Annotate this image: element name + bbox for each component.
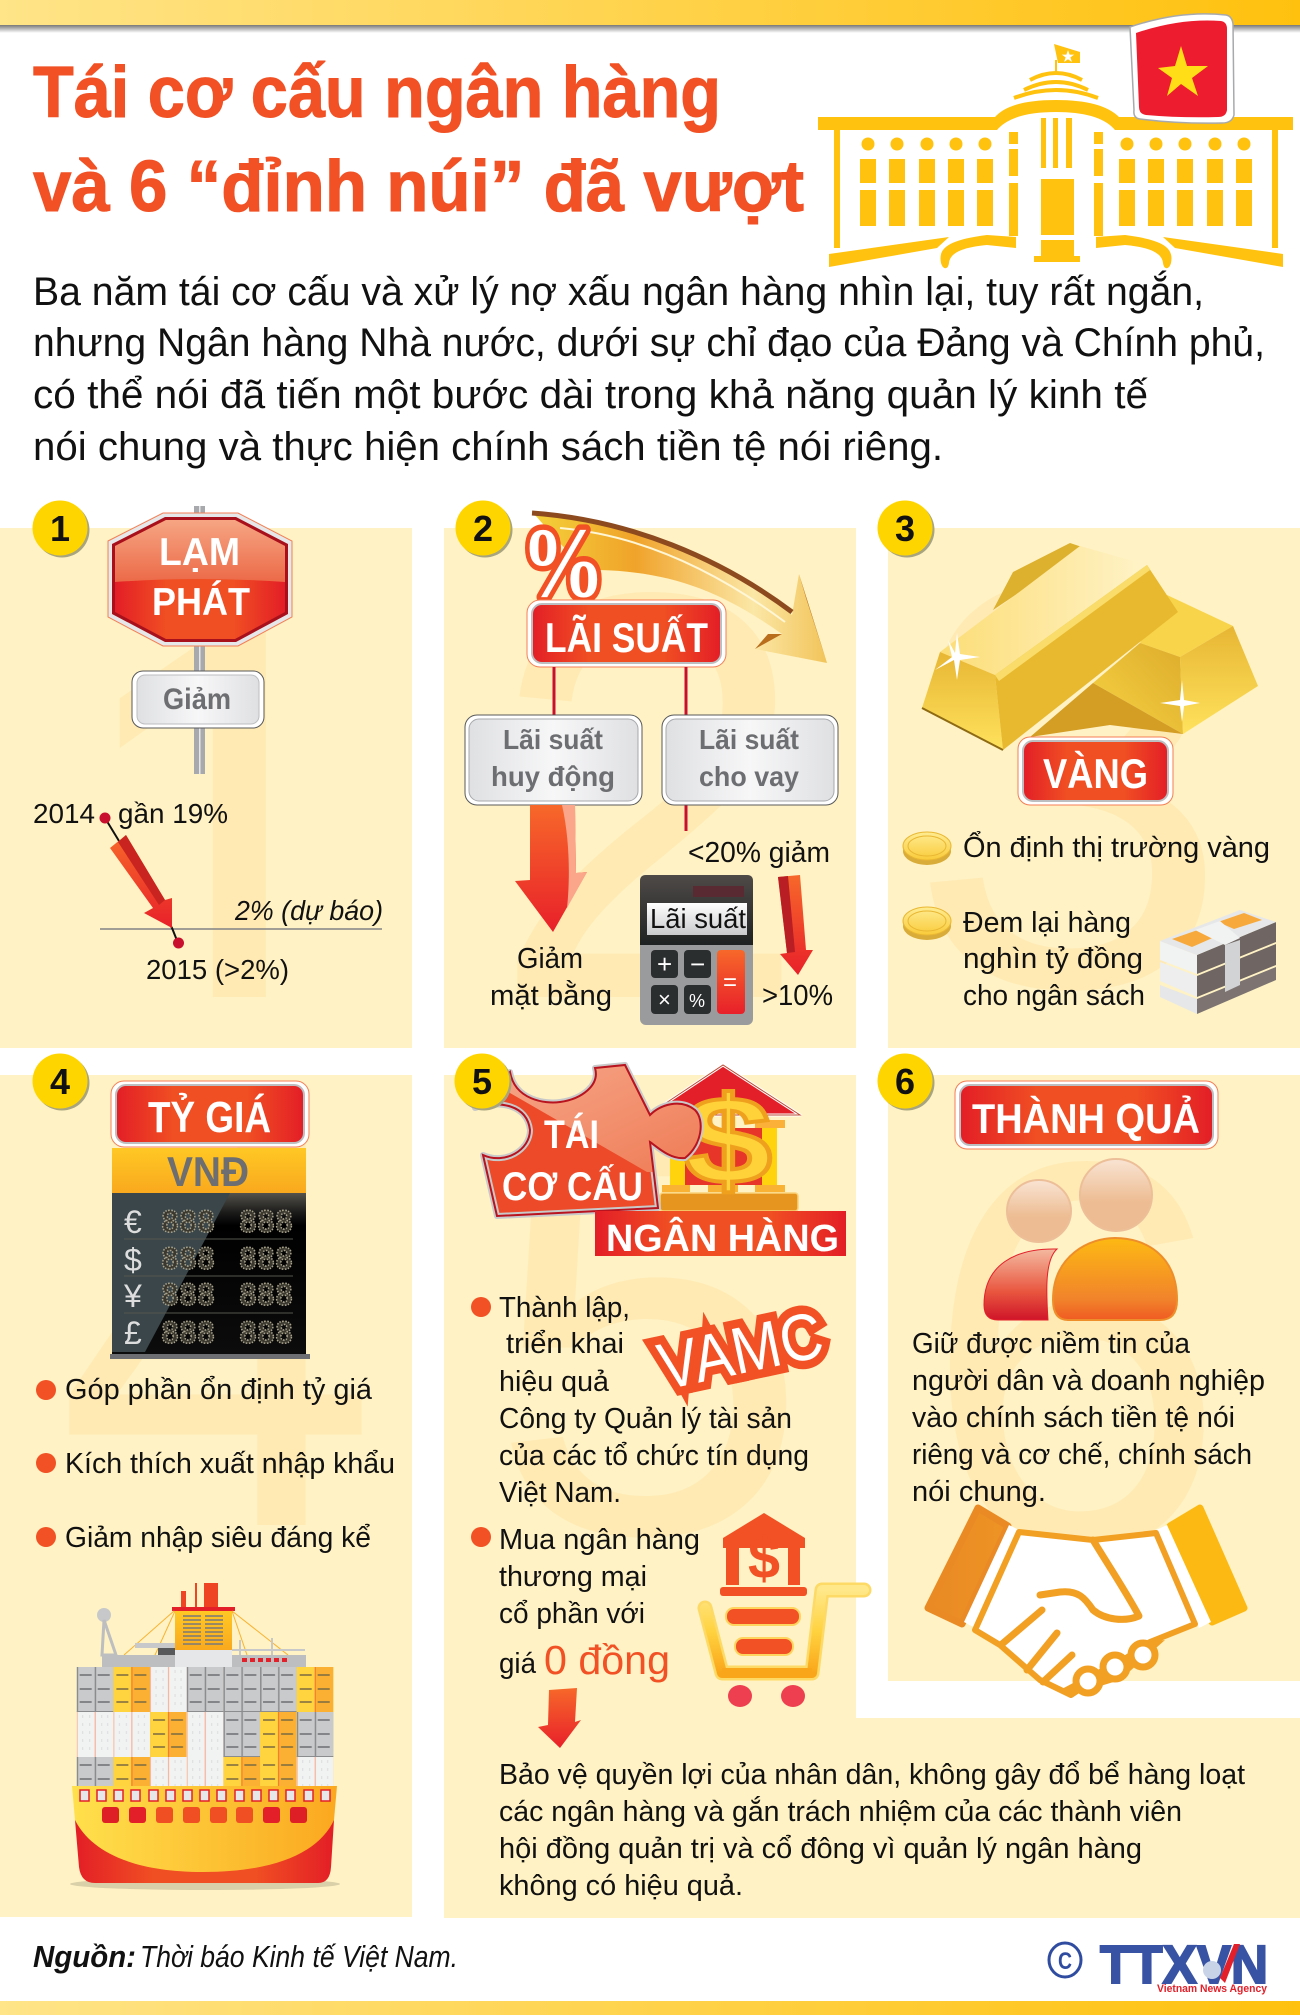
exchange rate board: $	[124, 1242, 142, 1278]
source	[33, 1939, 458, 1974]
icon: puzzle: CƠ CẤU	[502, 1163, 643, 1209]
text: bảo vệ quyền lợi: Bảo vệ quyền lợi của nhân dân, không gây đổ bể hàng loạt	[499, 1759, 1245, 1791]
arrow: big down	[515, 805, 587, 932]
logo: TTXVN: Vietnam News Agency	[1157, 1983, 1268, 1995]
banner: tỷ giá	[111, 1081, 309, 1147]
icon: puzzle: TÁI	[544, 1112, 599, 1157]
icon: government building with flag	[818, 14, 1293, 268]
watermark digit 2: 2	[488, 472, 811, 1120]
exchange rate board: €	[124, 1204, 142, 1240]
title	[33, 53, 804, 227]
icon: people	[984, 1159, 1177, 1320]
text: đem lại: nghìn tỷ đồng	[963, 943, 1143, 975]
icon: gold bars	[922, 543, 1258, 750]
chart: inflation drop: 2% (dự báo)	[234, 895, 383, 926]
text: đem lại	[963, 907, 1145, 1012]
text: mua ngân hàng: giá	[499, 1648, 537, 1680]
text: lending rate	[688, 837, 833, 1012]
chart: inflation drop	[33, 798, 383, 985]
badge 2: 2	[473, 508, 493, 549]
text: mua ngân hàng: Mua ngân hàng	[499, 1524, 700, 1556]
badge 3: 3	[895, 508, 915, 549]
banner: ngân hàng: NGÂN HÀNG	[606, 1216, 839, 1260]
source: Thời báo Kinh tế Việt Nam.	[140, 1939, 458, 1974]
box: lãi suất cho vay	[662, 715, 838, 805]
logo: TTXVN: TTXVN	[1100, 1935, 1268, 1995]
text: thành lập: hiệu quả	[499, 1366, 610, 1398]
icon: stop sign	[108, 506, 292, 774]
box: lãi suất cho vay: cho vay	[699, 761, 799, 792]
badge 4	[32, 1054, 90, 1110]
icon: calculator: +	[657, 949, 672, 979]
icon: calculator: Lãi suất	[650, 903, 746, 934]
text: giữ được niềm tin: nói chung.	[912, 1476, 1046, 1508]
badge 6: 6	[895, 1061, 915, 1102]
text: mua ngân hàng	[471, 1524, 700, 1683]
box: lãi suất huy động: Lãi suất	[503, 724, 603, 755]
arrow: small down	[538, 1688, 581, 1748]
exchange rate board: 888	[161, 1242, 215, 1279]
icon: container ship	[70, 1583, 340, 1890]
intro paragraph: nhưng Ngân hàng Nhà nước, dưới sự chỉ đạo của Đảng và Chính phủ,	[33, 321, 1265, 365]
logo text: VAMC: VAMC	[652, 1297, 829, 1404]
badge 1: 1	[50, 508, 70, 549]
bullet list: Góp phần ổn định tỷ giá	[65, 1374, 373, 1406]
badge 1	[32, 500, 90, 558]
title: Tái cơ cấu ngân hàng	[33, 53, 721, 133]
icon: puzzle	[475, 1060, 710, 1216]
text: ổn định: Ổn định thị trường vàng	[963, 830, 1270, 864]
text: thành lập: Việt Nam.	[499, 1477, 621, 1509]
icon: money stack	[1160, 910, 1276, 1014]
bullet list: Kích thích xuất nhập khẩu	[65, 1448, 395, 1480]
icon: bank house	[648, 1065, 800, 1211]
exchange rate board: 888	[161, 1278, 215, 1315]
icon: handshake	[928, 1508, 1244, 1695]
exchange rate board: VNĐ	[167, 1148, 249, 1195]
banner: lãi suất: LÃI SUẤT	[545, 614, 708, 661]
title: và 6 “đỉnh núi” đã vượt	[33, 147, 804, 227]
banner: vàng: VÀNG	[1043, 750, 1148, 797]
text: bảo vệ quyền lợi	[499, 1759, 1245, 1902]
exchange rate board: 888	[239, 1316, 293, 1353]
text: thành lập: của các tổ chức tín dụng	[499, 1440, 809, 1472]
text: mua ngân hàng: cổ phần với	[499, 1598, 645, 1630]
exchange rate board: 888	[161, 1316, 215, 1353]
panel: 6 thành quả	[888, 1047, 1300, 1695]
icon: bank house: $	[684, 1072, 772, 1210]
text: lending rate: >10%	[762, 980, 833, 1012]
banner: thành quả	[955, 1081, 1218, 1149]
badge 5	[454, 1054, 512, 1110]
icon: coin 2	[903, 907, 951, 940]
exchange rate board: £	[124, 1315, 142, 1351]
text: bảo vệ quyền lợi: không có hiệu quả.	[499, 1870, 743, 1902]
text: giữ được niềm tin: Giữ được niềm tin của	[912, 1328, 1191, 1360]
intro paragraph: có thể nói đã tiến một bước dài trong khả năng quản lý kinh tế	[33, 373, 1148, 417]
source: Nguồn:	[33, 1939, 136, 1974]
text: mua ngân hàng: 0 đồng	[544, 1637, 670, 1683]
banner: tỷ giá: TỶ GIÁ	[148, 1092, 271, 1142]
icon: bank orange: $	[748, 1526, 780, 1591]
chart: inflation drop: 2015 (>2%)	[146, 954, 289, 985]
text: thành lập	[471, 1292, 809, 1509]
text: đem lại: Đem lại hàng	[963, 907, 1131, 939]
arrow: small down	[778, 875, 813, 975]
icon: shopping cart	[705, 1590, 864, 1707]
text: bảo vệ quyền lợi: các ngân hàng và gắn trách nhiệm của các thành viên	[499, 1795, 1182, 1828]
label: giảm: Giảm	[163, 683, 231, 716]
icon: calculator: =	[723, 969, 737, 996]
badge 5: 5	[472, 1061, 492, 1102]
label: giảm	[132, 671, 264, 728]
panel: 3 vàng	[888, 460, 1300, 1108]
bottom colour bar	[0, 2001, 1300, 2015]
bullet list	[36, 1374, 395, 1554]
icon: calculator	[640, 875, 753, 1025]
icon: calculator: %	[689, 991, 705, 1011]
connectors	[554, 667, 686, 831]
text: giữ được niềm tin	[912, 1328, 1265, 1508]
intro paragraph	[33, 269, 1265, 469]
bullet list: Giảm nhập siêu đáng kể	[65, 1522, 371, 1554]
arrow: curved gold	[532, 512, 827, 663]
text: bảo vệ quyền lợi: hội đồng quản trị và cổ đông vì quản lý ngân hàng	[499, 1833, 1142, 1865]
watermark digit 1: 1	[62, 502, 396, 1172]
text: thành lập: Thành lập,	[499, 1292, 630, 1324]
text: giữ được niềm tin: vào chính sách tiền tệ nói	[912, 1402, 1235, 1434]
exchange rate board: ¥	[123, 1278, 142, 1314]
intro paragraph: nói chung và thực hiện chính sách tiền tệ nói riêng.	[33, 425, 943, 469]
icon: bank orange	[720, 1513, 807, 1596]
text: giữ được niềm tin: người dân và doanh nghiệp	[912, 1365, 1265, 1397]
text: mua ngân hàng: thương mại	[499, 1561, 647, 1593]
exchange rate board	[110, 1148, 310, 1359]
badge 3	[878, 500, 934, 558]
box: lãi suất cho vay: Lãi suất	[699, 724, 799, 755]
text: lending rate: <20% giảm	[688, 837, 830, 869]
exchange rate board: 888	[161, 1205, 215, 1242]
box: lãi suất huy động	[465, 715, 642, 805]
icon: calculator: ×	[658, 987, 671, 1012]
icon: stop sign: PHÁT	[152, 580, 250, 624]
exchange rate board: 888	[239, 1205, 293, 1242]
badge 2	[456, 500, 512, 558]
icon: stop sign: LẠM	[159, 531, 240, 574]
panel: 1 lạm phát	[0, 506, 412, 1048]
top colour bar	[0, 0, 1300, 33]
logo: TTXVN: C	[1058, 1948, 1072, 1975]
banner: vàng	[1018, 737, 1173, 805]
icon: percent sign: %	[521, 507, 605, 618]
badge 6	[878, 1054, 934, 1110]
text: đem lại: cho ngân sách	[963, 980, 1145, 1012]
text: giữ được niềm tin: riêng và cơ chế, chính sách	[912, 1439, 1252, 1471]
panel: 5 tái cơ cấu	[444, 1007, 1300, 1918]
banner: thành quả: THÀNH QUẢ	[972, 1094, 1200, 1142]
panel: 4 tỷ giá	[0, 1000, 412, 1917]
icon: coin 1	[903, 832, 951, 865]
watermark digit 5: 5	[488, 1007, 811, 1655]
text: thành lập: Công ty Quản lý tài sản	[499, 1403, 792, 1435]
banner: lãi suất	[527, 600, 726, 667]
badge 4: 4	[50, 1061, 70, 1102]
text: giảm mặt bằng	[490, 943, 612, 1012]
watermark digit 4: 4	[56, 1000, 379, 1648]
watermark digit 3: 3	[908, 460, 1231, 1108]
box: lãi suất huy động: huy động	[491, 761, 615, 792]
text: giảm mặt bằng: Giảm	[517, 943, 583, 975]
panel: 2 lãi suất	[444, 472, 856, 1120]
chart: inflation drop: gần 19%	[118, 798, 228, 829]
watermark digit 6: 6	[922, 1047, 1228, 1662]
intro paragraph: Ba năm tái cơ cấu và xử lý nợ xấu ngân hàng nhìn lại, tuy rất ngắn,	[33, 269, 1204, 314]
icon: calculator: −	[690, 949, 705, 979]
chart: inflation drop: 2014	[33, 798, 95, 829]
text: thành lập: triển khai	[506, 1328, 624, 1360]
text: giảm mặt bằng: mặt bằng	[490, 979, 612, 1012]
exchange rate board: 888	[239, 1242, 293, 1279]
exchange rate board: 888	[239, 1278, 293, 1315]
